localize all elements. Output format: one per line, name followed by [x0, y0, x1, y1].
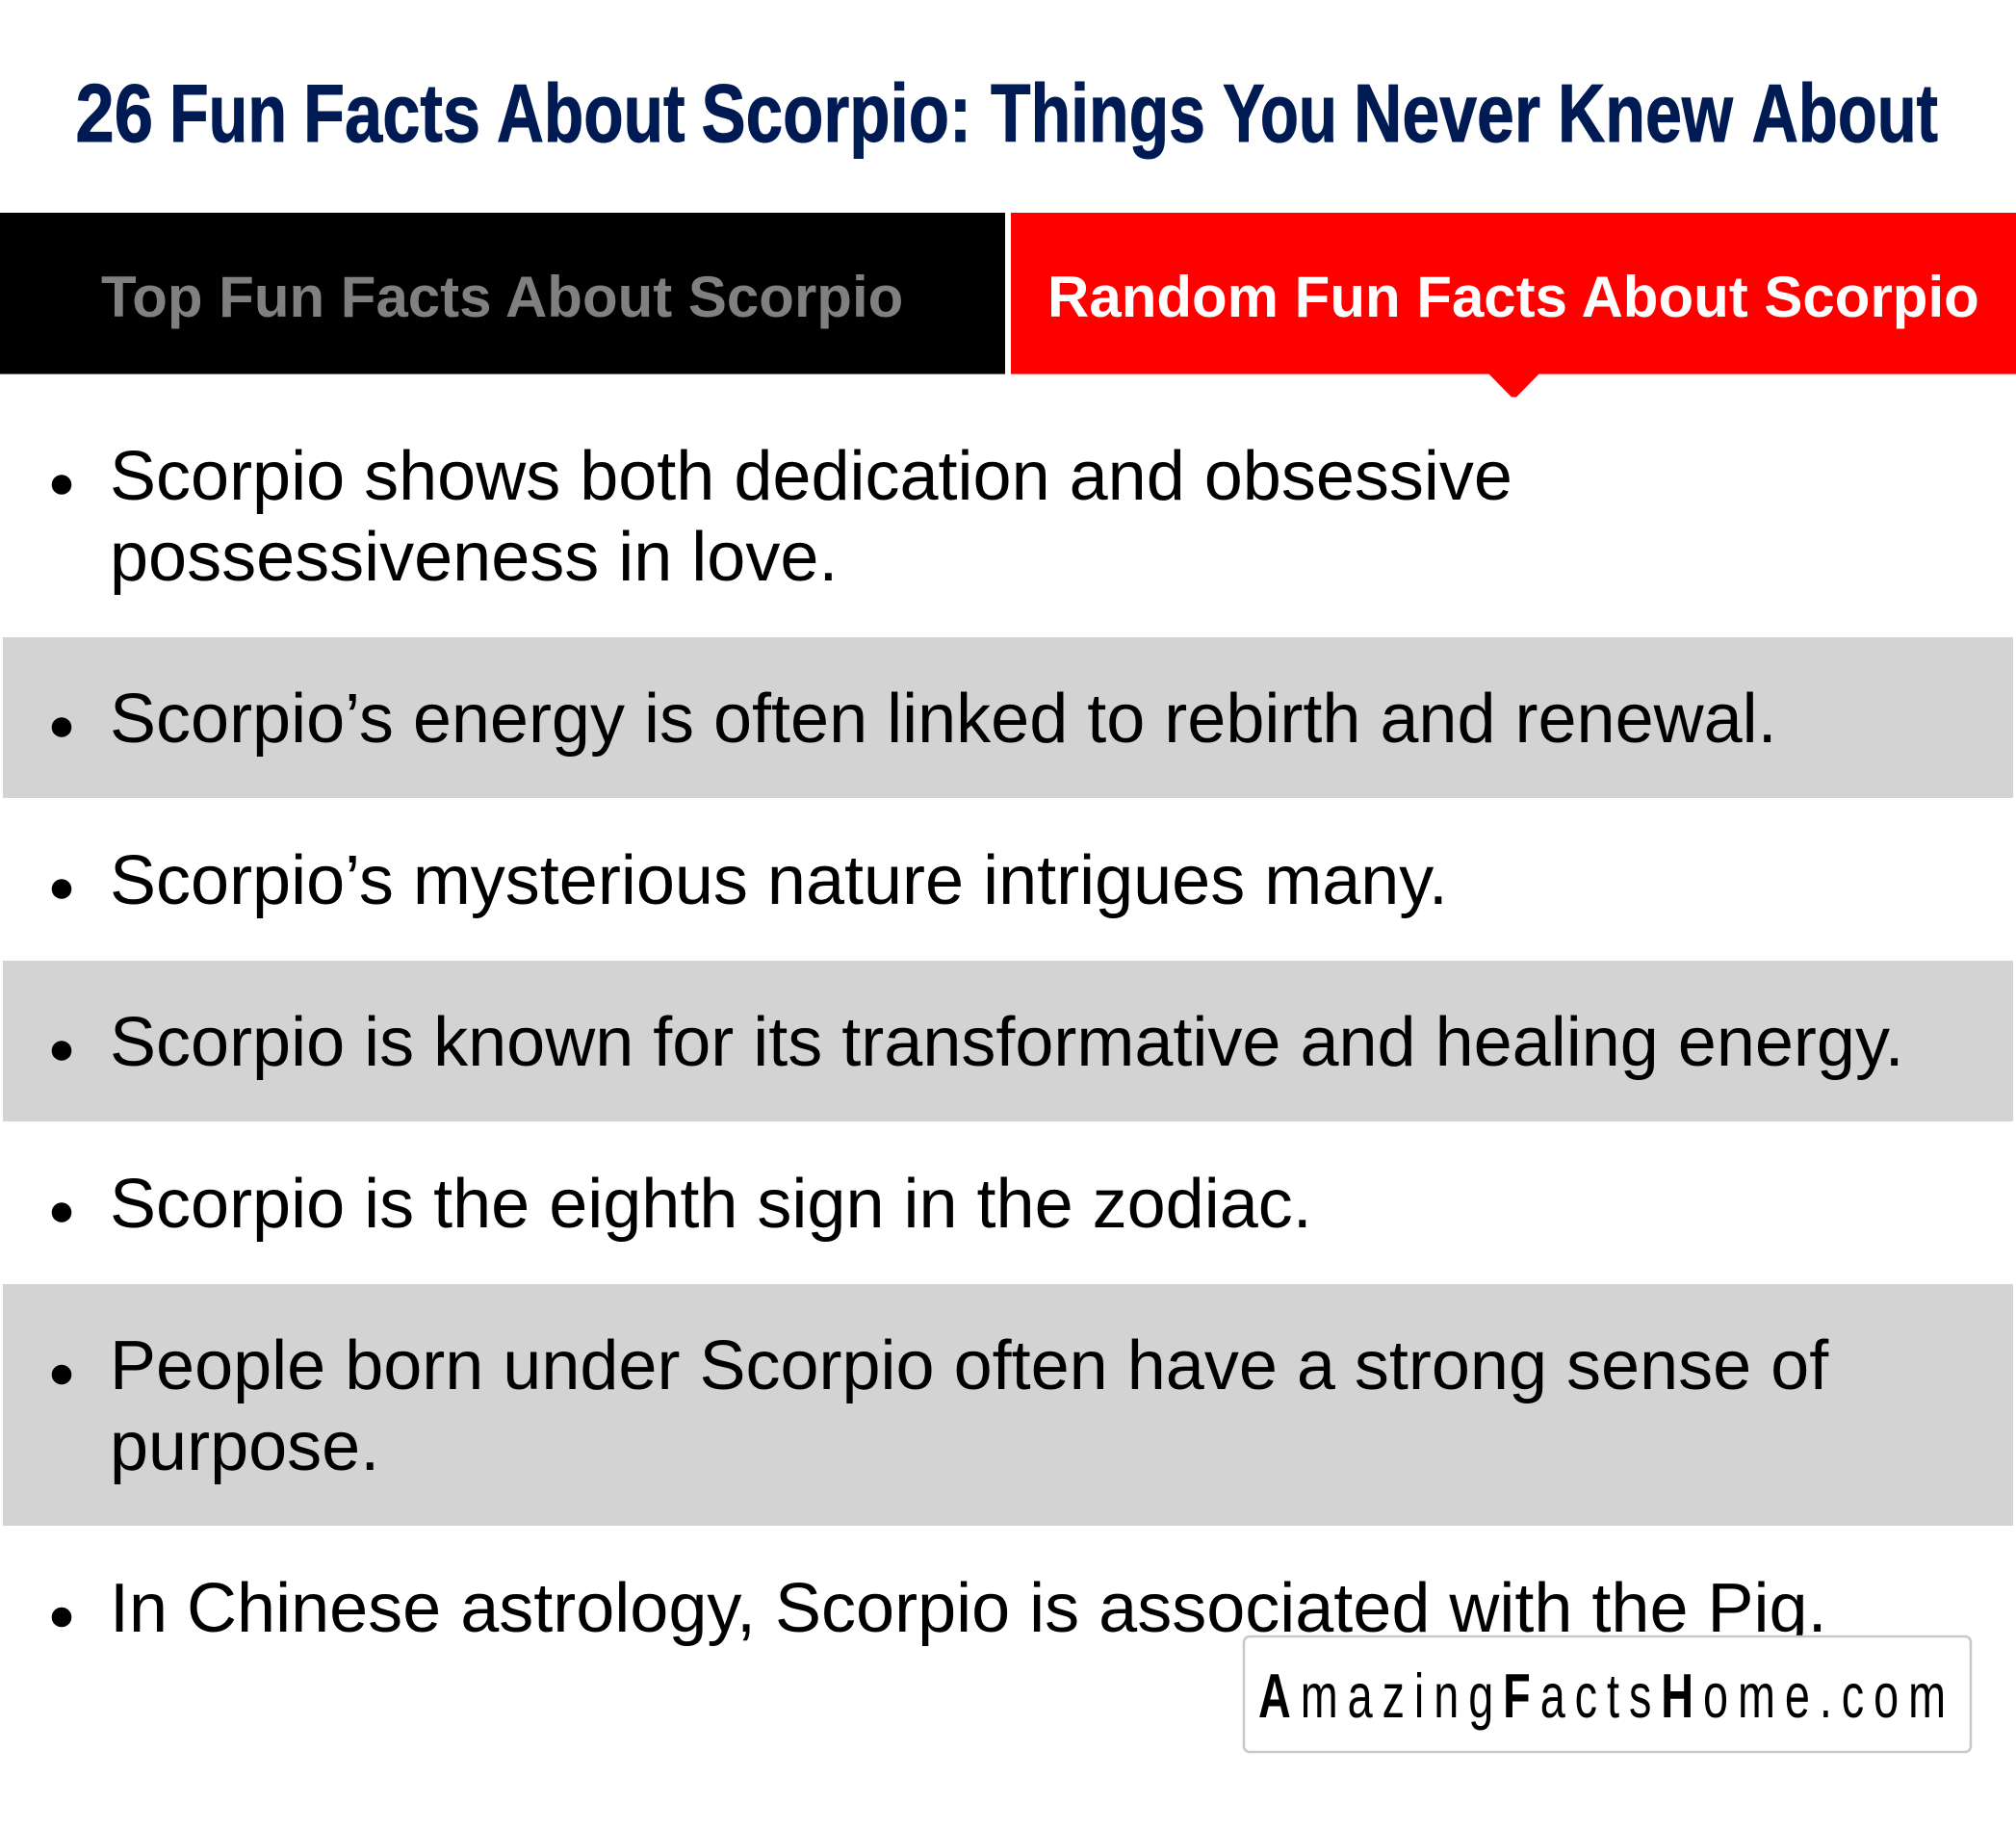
fact row 6: purpose.: [110, 1408, 379, 1485]
fact row 4: [3, 961, 2013, 1121]
fact row 7: In Chinese astrology, Scorpio is associated with the Pig.: [110, 1570, 1827, 1647]
title: 26: [75, 68, 153, 160]
fact row 6: People born under Scorpio often have a strong sense of: [110, 1327, 1829, 1404]
title: About: [497, 68, 685, 160]
fact row 1: Scorpio shows both dedication and obsessive: [110, 438, 1512, 515]
fact row 1: [52, 438, 1512, 596]
watermark badge: [1244, 1636, 1971, 1752]
fact row 4: Scorpio is known for its transformative and healing energy.: [110, 1004, 1904, 1081]
title: [75, 68, 1938, 160]
title: Scorpio:: [701, 68, 971, 160]
title: Fun: [169, 68, 287, 160]
title: Knew: [1558, 68, 1734, 160]
fact row 6: [3, 1284, 2013, 1526]
fact row 1: possessiveness in love.: [110, 519, 838, 596]
fact row 2: [3, 637, 2013, 798]
title: You: [1223, 68, 1337, 160]
watermark badge: AmazingFactsHome.com: [1258, 1662, 1955, 1732]
fact row 2: Scorpio’s energy is often linked to rebirth and renewal.: [110, 681, 1777, 758]
title: Things: [991, 68, 1205, 160]
title: Facts: [303, 68, 480, 160]
tab: top fun facts (inactive): Top Fun Facts About Scorpio: [101, 265, 903, 329]
fact row 3: Scorpio’s mysterious nature intrigues many.: [110, 842, 1448, 919]
tab: random fun facts (active): [1011, 213, 2016, 397]
fact row 5: Scorpio is the eighth sign in the zodiac.: [110, 1166, 1312, 1243]
tab: top fun facts (inactive): [0, 213, 1005, 374]
title: Never: [1354, 68, 1540, 160]
title: About: [1752, 68, 1938, 160]
tab: random fun facts (active): Random Fun Facts About Scorpio: [1047, 265, 1979, 329]
